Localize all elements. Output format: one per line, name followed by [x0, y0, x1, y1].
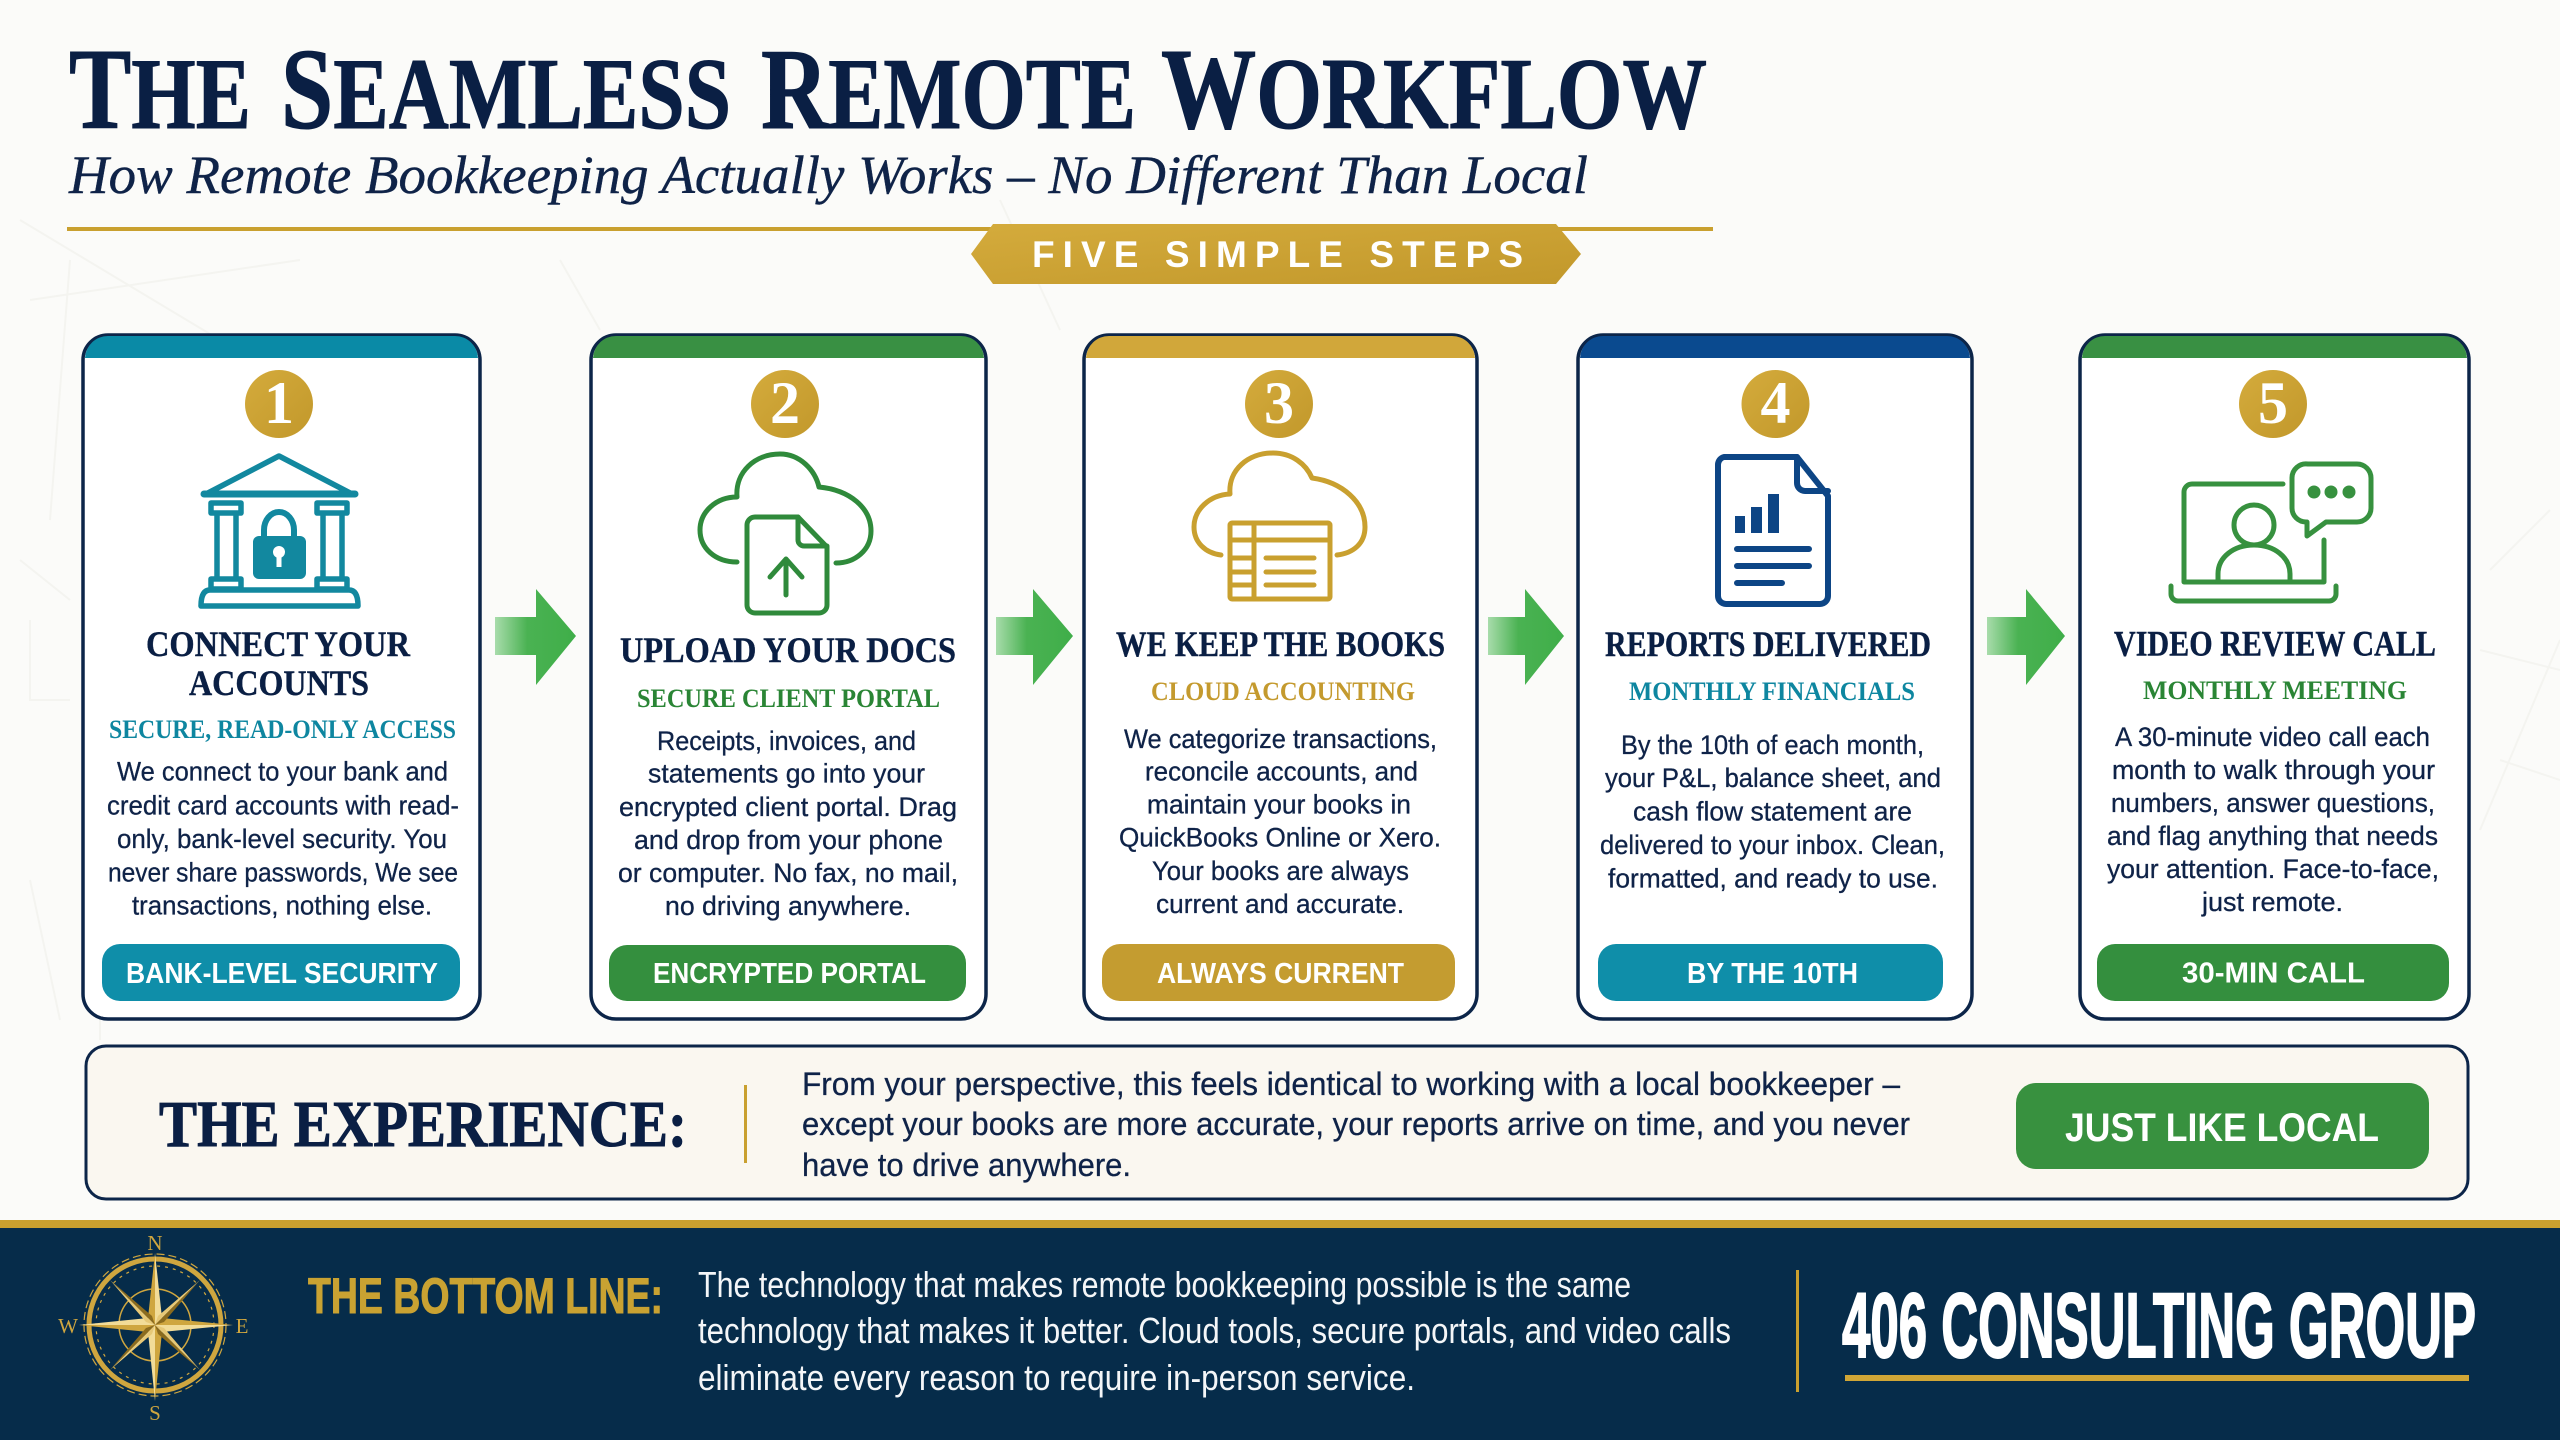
body text: [1600, 730, 1945, 894]
heading: CONNECT YOUR: [146, 624, 411, 664]
body text: maintain your books in: [1147, 790, 1411, 820]
step number 4: 4: [1760, 370, 1790, 436]
heading: [146, 624, 411, 703]
icon: compass rose: N: [147, 1231, 163, 1255]
body text: Your books are always: [1152, 856, 1409, 886]
panel: step 2: [591, 335, 986, 1019]
icon: compass rose: S: [149, 1401, 161, 1425]
pill: by the 10th: [1598, 944, 1943, 1001]
pill: encrypted portal: ENCRYPTED PORTAL: [653, 958, 926, 990]
experience text: [802, 1066, 1910, 1183]
icon: cloud ledger: [1194, 453, 1365, 599]
experience text: have to drive anywhere.: [802, 1147, 1131, 1183]
title: SEAMLESS: [281, 26, 731, 153]
body text: and drop from your phone: [634, 825, 943, 855]
bottom line text: The technology that makes remote bookkeeping possible is the same: [698, 1264, 1631, 1305]
body text: Receipts, invoices, and: [657, 726, 916, 756]
step number 5: [2239, 370, 2307, 438]
step number 1: 1: [264, 370, 294, 436]
body text: By the 10th of each month,: [1621, 730, 1924, 760]
icon: compass rose: E: [236, 1314, 248, 1338]
step number 2: 2: [770, 370, 800, 436]
icon: financial report document: [1718, 457, 1828, 604]
body text: just remote.: [2201, 887, 2343, 917]
subheading: MONTHLY MEETING: [2143, 676, 2407, 705]
body text: [618, 726, 958, 921]
pill: encrypted portal: [609, 945, 966, 1001]
icon: bank with padlock: [201, 456, 358, 606]
subheading: CLOUD ACCOUNTING: [1151, 677, 1415, 706]
header rule: [67, 227, 1713, 231]
arrow 1 to 2: [495, 589, 576, 685]
icon: compass rose: W: [58, 1314, 78, 1338]
button: just like local: [2016, 1083, 2429, 1169]
body text: encrypted client portal. Drag: [619, 792, 957, 822]
heading: ACCOUNTS: [189, 663, 369, 703]
footer divider: [1796, 1270, 1799, 1392]
body text: We connect to your bank and: [117, 756, 448, 786]
body text: [107, 756, 459, 920]
body text: month to walk through your: [2112, 755, 2435, 785]
body text: current and accurate.: [1156, 889, 1404, 919]
icon: cloud upload document: [700, 454, 871, 613]
subheading: SECURE, READ-ONLY ACCESS: [109, 715, 456, 744]
body text: statements go into your: [648, 758, 925, 788]
step number 3: 3: [1264, 370, 1294, 436]
subheading: MONTHLY FINANCIALS: [1629, 677, 1915, 706]
pill: always current: ALWAYS CURRENT: [1157, 958, 1404, 990]
bottom line label: THE BOTTOM LINE:: [308, 1268, 663, 1324]
experience text: except your books are more accurate, your reports arrive on time, and you never: [802, 1106, 1910, 1142]
heading: REPORTS DELIVERED: [1605, 624, 1931, 664]
pill: 30-min call: [2097, 944, 2449, 1001]
body text: QuickBooks Online or Xero.: [1119, 822, 1441, 852]
body text: never share passwords, We see: [108, 858, 458, 888]
divider: [744, 1085, 747, 1163]
body text: numbers, answer questions,: [2111, 788, 2435, 818]
panel: step 1: [83, 335, 480, 1019]
body text: reconcile accounts, and: [1145, 756, 1418, 786]
body text: and flag anything that needs: [2107, 821, 2438, 851]
bottom line text: eliminate every reason to require in-person service.: [698, 1357, 1415, 1398]
panel: step 5: [2080, 335, 2469, 1019]
icon: compass rose: [58, 1231, 248, 1425]
bottom line text: [698, 1264, 1731, 1398]
body text: A 30-minute video call each: [2115, 722, 2430, 752]
pill: always current: [1102, 944, 1455, 1001]
title: THE: [69, 26, 251, 153]
footer band: [0, 1220, 2560, 1440]
body text: We categorize transactions,: [1124, 724, 1437, 754]
experience heading: THE EXPERIENCE:: [159, 1088, 687, 1161]
panel: step 4: [1578, 335, 1972, 1019]
body text: transactions, nothing else.: [132, 890, 432, 920]
pill: bank-level security: [102, 944, 460, 1001]
step number 3: [1245, 370, 1313, 438]
heading: WE KEEP THE BOOKS: [1116, 624, 1445, 664]
body text: your P&L, balance sheet, and: [1605, 763, 1941, 793]
step number 2: [751, 370, 819, 438]
icon: video call with chat bubble: [2171, 464, 2371, 601]
pill: by the 10th: BY THE 10TH: [1687, 958, 1858, 990]
heading: UPLOAD YOUR DOCS: [620, 630, 956, 670]
body text: or computer. No fax, no mail,: [618, 858, 958, 888]
body text: your attention. Face-to-face,: [2107, 854, 2439, 884]
body text: cash flow statement are: [1633, 796, 1912, 826]
arrow 3 to 4: [1488, 589, 1564, 685]
body text: no driving anywhere.: [665, 891, 911, 921]
experience text: From your perspective, this feels identical to working with a local bookkeeper –: [802, 1066, 1900, 1102]
subheading: SECURE CLIENT PORTAL: [637, 684, 940, 713]
title: WORKFLOW: [1161, 26, 1707, 153]
body text: [2107, 722, 2439, 917]
arrow 4 to 5: [1987, 589, 2065, 685]
panel: step 3: [1084, 335, 1477, 1019]
title: REMOTE: [761, 26, 1136, 153]
body text: [1119, 724, 1441, 919]
body text: credit card accounts with read-: [107, 790, 459, 820]
pill: bank-level security: BANK-LEVEL SECURITY: [126, 958, 438, 990]
body text: delivered to your inbox. Clean,: [1600, 830, 1945, 860]
subtitle: How Remote Bookkeeping Actually Works – No Different Than Local: [68, 145, 1588, 205]
title: [69, 26, 1707, 153]
badge: five simple steps: FIVE SIMPLE STEPS: [1032, 234, 1523, 275]
panel: the experience: [86, 1046, 2468, 1199]
badge: five simple steps: [971, 224, 1581, 284]
step number 5: 5: [2258, 370, 2288, 436]
pill: 30-min call: 30-MIN CALL: [2182, 958, 2365, 990]
heading: VIDEO REVIEW CALL: [2114, 624, 2436, 664]
button: just like local: JUST LIKE LOCAL: [2065, 1106, 2379, 1150]
arrow 2 to 3: [996, 589, 1073, 685]
step number 4: [1742, 370, 1810, 438]
body text: only, bank-level security. You: [117, 824, 447, 854]
bottom line text: technology that makes it better. Cloud tools, secure portals, and video calls: [698, 1310, 1731, 1351]
body text: formatted, and ready to use.: [1608, 864, 1938, 894]
step number 1: [245, 370, 313, 438]
